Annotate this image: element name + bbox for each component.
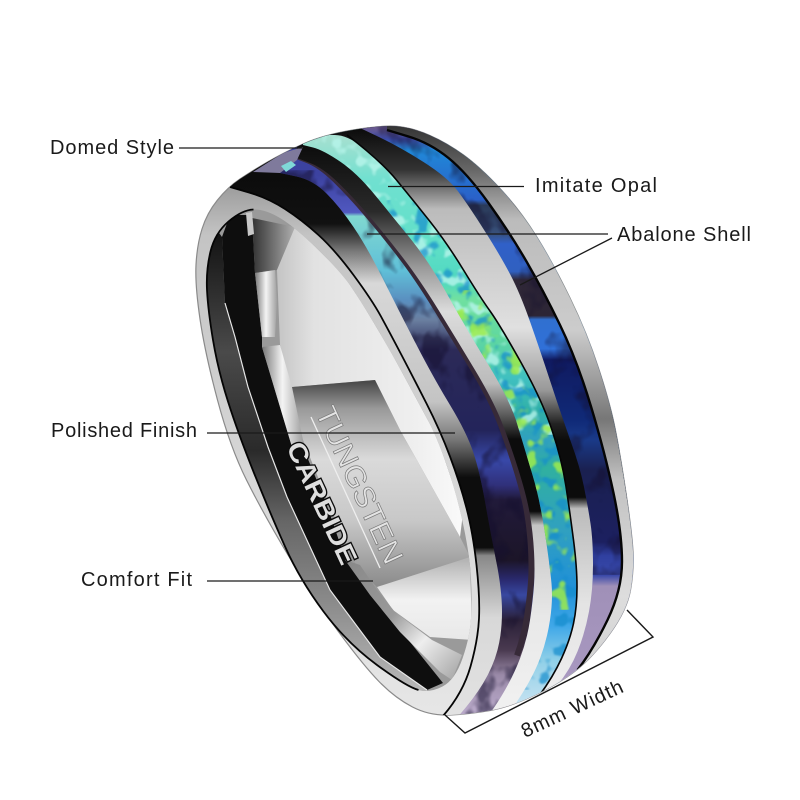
shell texture right [374, 126, 621, 575]
ring interior [208, 210, 472, 691]
opal right line [347, 135, 577, 696]
label: 8mm Width: 8mm Width [518, 676, 627, 743]
leaders: Abalone Shell [367, 234, 612, 285]
inner grey band [208, 233, 427, 691]
ring silhouette and front bevel [196, 126, 633, 715]
ring bands [230, 126, 634, 716]
interior base [219, 210, 472, 691]
label: Comfort Fit: Comfort Fit [81, 569, 192, 591]
engraved plate [292, 380, 470, 587]
ring photo [195, 126, 634, 716]
shell texture left [280, 170, 550, 715]
dimension bracket [445, 610, 653, 733]
lower bright wall [377, 557, 472, 640]
label: Domed Style: Domed Style [50, 137, 174, 159]
width dimension [445, 610, 653, 743]
inner black strip [222, 215, 443, 690]
shell right line [387, 130, 622, 670]
abalone shell band right [361, 126, 634, 681]
brown inner shell strip [294, 155, 532, 656]
lavender shell far edge [253, 147, 303, 173]
teal chip [281, 161, 296, 172]
pale flecks [321, 136, 553, 435]
leader: Polished Finish [207, 432, 455, 434]
silver ridge upper [255, 270, 277, 337]
silver band between opal and shell [330, 126, 634, 692]
opal band [303, 126, 634, 703]
upper inner shading [252, 218, 295, 273]
green flecks [446, 290, 576, 610]
text: CARBIDE: CARBIDE [281, 437, 364, 569]
glint on rim [246, 212, 254, 236]
text: TUNGSTEN: TUNGSTEN [309, 402, 409, 569]
leader: Comfort Fit [207, 580, 373, 582]
far wall [277, 227, 463, 537]
label: Polished Finish: Polished Finish [51, 420, 197, 442]
silver ridge middle [262, 345, 303, 447]
leader: Domed Style [179, 147, 303, 149]
blue flecks [386, 200, 576, 690]
black line at inner rim [230, 187, 479, 716]
label: Imitate Opal: Imitate Opal [535, 175, 657, 197]
abalone shell band left [280, 135, 534, 714]
lower ridge [345, 560, 462, 680]
silver band between shell and opal [297, 126, 634, 710]
thin white reflection [225, 303, 427, 690]
label: Abalone Shell [367, 224, 751, 285]
silver band left [230, 126, 540, 716]
opal mottling [321, 136, 576, 690]
outer silver band [387, 126, 634, 664]
leader: Imitate Opal [388, 186, 524, 188]
label: Abalone Shell: Abalone Shell [617, 224, 751, 246]
left black edge line [207, 210, 418, 690]
engraved line [311, 417, 380, 568]
